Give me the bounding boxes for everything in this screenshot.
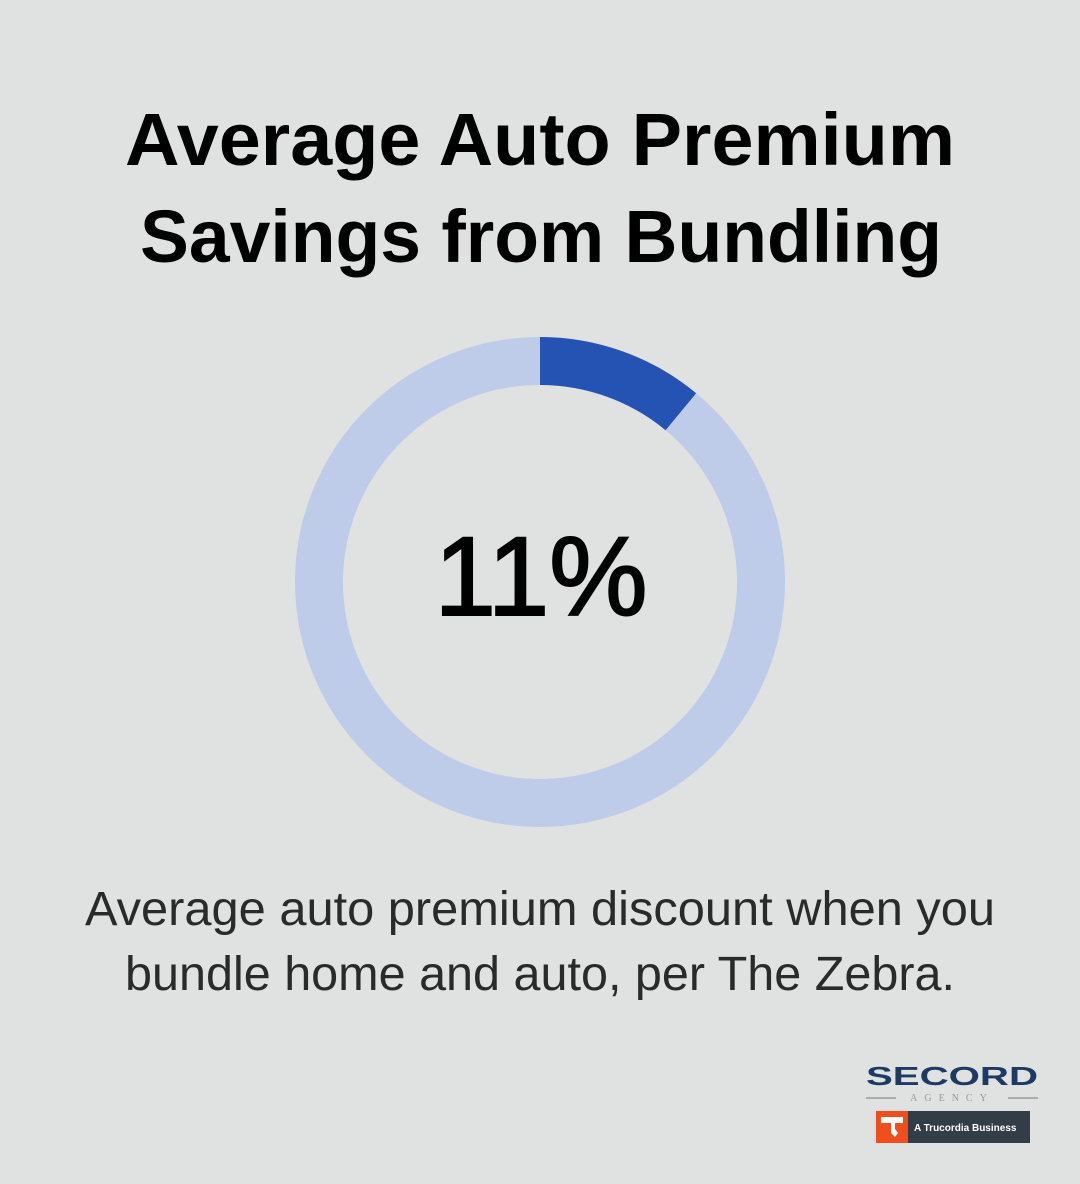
logo: Secord Agency	[866, 1061, 1038, 1143]
logo: Secord Agency: AGENCY	[910, 1093, 994, 1104]
description text: bundle home and auto, per The Zebra.	[125, 948, 955, 1001]
center value: 11%	[434, 514, 648, 639]
donut chart	[319, 361, 761, 803]
title: Average Auto Premium	[125, 98, 955, 181]
description text: Average auto premium discount when you	[85, 883, 995, 936]
title	[125, 98, 955, 278]
logo: Secord Agency: SECORD	[866, 1061, 1038, 1091]
description text	[85, 883, 995, 1001]
title: Savings from Bundling	[140, 195, 942, 278]
logo: Secord Agency: A Trucordia Business	[914, 1123, 1017, 1134]
